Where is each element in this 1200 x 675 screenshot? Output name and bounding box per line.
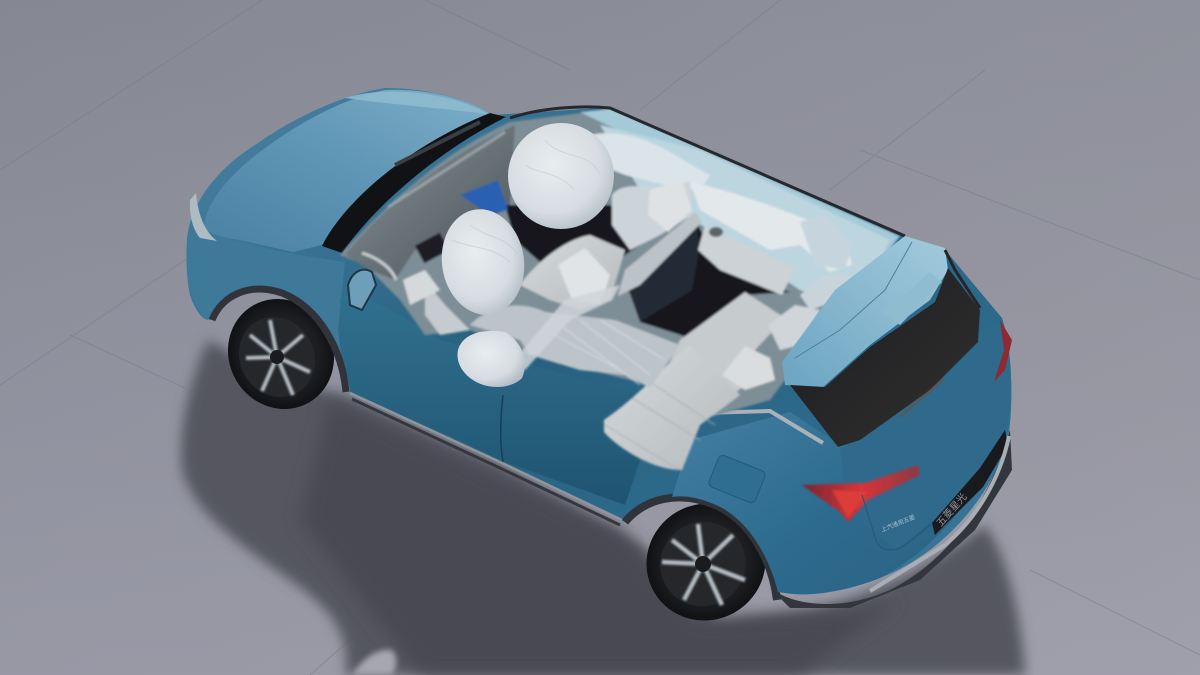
tail lamp [802,465,920,522]
windshield base [322,113,506,253]
driver headrest [558,248,610,305]
rear wheel [625,482,787,642]
front seat back passenger dark [625,218,700,322]
main body side [186,88,1011,594]
fuel door [707,454,767,504]
side sill chrome [350,393,622,520]
hood [204,90,505,252]
passenger seat back [612,182,692,250]
headlight [190,193,217,241]
cabin dash [345,125,515,280]
spoiler rear roof [782,236,948,388]
rear end / hatch [840,318,1011,550]
cabin interior [340,109,900,470]
rear taillight right [994,320,1012,382]
driver side bag low [425,280,470,335]
chrome window trim [700,411,823,443]
rear seat bench [604,345,740,470]
license plate: 五菱星光 [933,490,970,529]
rear seat cushion [655,292,785,440]
license plate [932,430,1008,535]
shadow light patch [352,650,396,675]
mirror [348,270,376,310]
hatch line [862,490,975,550]
driver side curtain airbag [470,306,680,388]
translucent glass roof [580,109,900,262]
airbag passenger front [508,123,614,229]
airbag driver side thorax [458,331,525,387]
seat passenger arm [618,212,702,296]
rear seat lines [605,382,715,470]
airbag driver front [435,204,531,320]
steering wheel [362,253,396,280]
hood highlight [345,91,488,114]
dark floor front [505,205,655,265]
front wheel [208,280,354,428]
rear bumper dark [770,430,1012,608]
wheel arch rear [625,497,777,600]
roof rail [510,107,905,236]
rear headrests [722,346,775,390]
driver seat [520,235,625,310]
rear quarter panel [672,350,1010,594]
upper right glass [600,125,890,310]
passenger headrest [648,180,692,232]
cabin interior base [340,110,895,470]
front fender [187,234,346,392]
rear spoiler lip [945,250,980,308]
ground shadow [181,340,1025,675]
dark footwell rear [640,220,790,338]
passenger door panel [698,225,795,295]
wheel arch front [212,289,346,392]
seat belt band [510,285,620,370]
passenger door airbag curtain [590,133,710,190]
rear bumper trim [870,436,1009,591]
door panels [340,294,660,505]
rear window [790,268,980,447]
screen [460,180,508,215]
badge: 上汽通用五菱 [880,513,916,534]
car [186,88,1012,642]
